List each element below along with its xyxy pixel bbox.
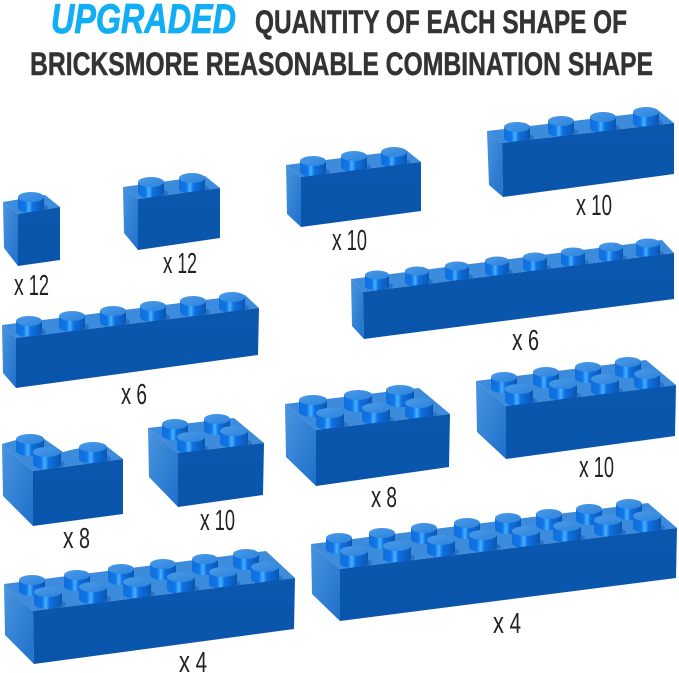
label: x 10: x 10 <box>200 502 235 537</box>
brick: 6x2 <box>4 549 295 664</box>
brick: 3x2 <box>285 385 450 486</box>
brick: 2x2 <box>148 414 264 507</box>
brick: 4x1 <box>487 107 674 197</box>
title <box>30 0 653 82</box>
label: x 8: x 8 <box>63 520 90 555</box>
label: x 12: x 12 <box>163 245 197 280</box>
brick: 6x1 <box>2 292 259 388</box>
label: x 6: x 6 <box>512 322 539 357</box>
brick: 8x2 <box>311 499 677 621</box>
brick: 2x1 <box>123 173 220 250</box>
brick: 8x1 <box>351 238 674 339</box>
label: x 12: x 12 <box>14 267 49 302</box>
brick: 1x1 <box>3 192 60 266</box>
brick: 4x2 <box>476 357 676 459</box>
brick: 3x1 <box>286 147 421 227</box>
label: x 6: x 6 <box>121 376 147 411</box>
label: x 8: x 8 <box>371 479 397 514</box>
label: x 10: x 10 <box>332 222 367 257</box>
label: x 10: x 10 <box>576 187 612 222</box>
brick: L-shaped corner <box>2 434 123 526</box>
label: x 10: x 10 <box>579 449 614 484</box>
label: x 4: x 4 <box>493 605 521 640</box>
